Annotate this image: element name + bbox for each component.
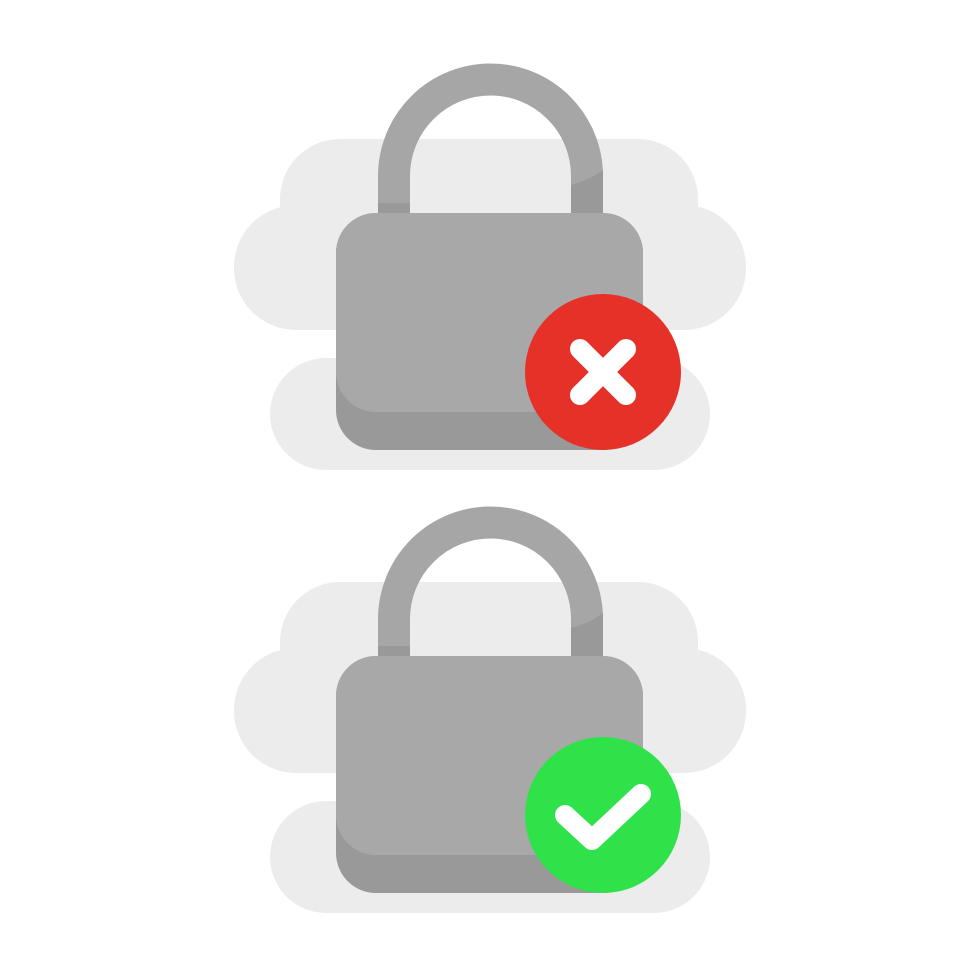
icon: padlock top — [336, 80, 643, 450]
panel: locked failure — [234, 80, 746, 470]
panel: locked success — [234, 522, 746, 913]
icon: padlock bottom — [336, 522, 643, 893]
icon: green check badge — [525, 737, 681, 893]
icon: red error badge — [525, 294, 681, 450]
cloud background top — [234, 139, 746, 470]
cloud background bottom — [234, 582, 746, 913]
